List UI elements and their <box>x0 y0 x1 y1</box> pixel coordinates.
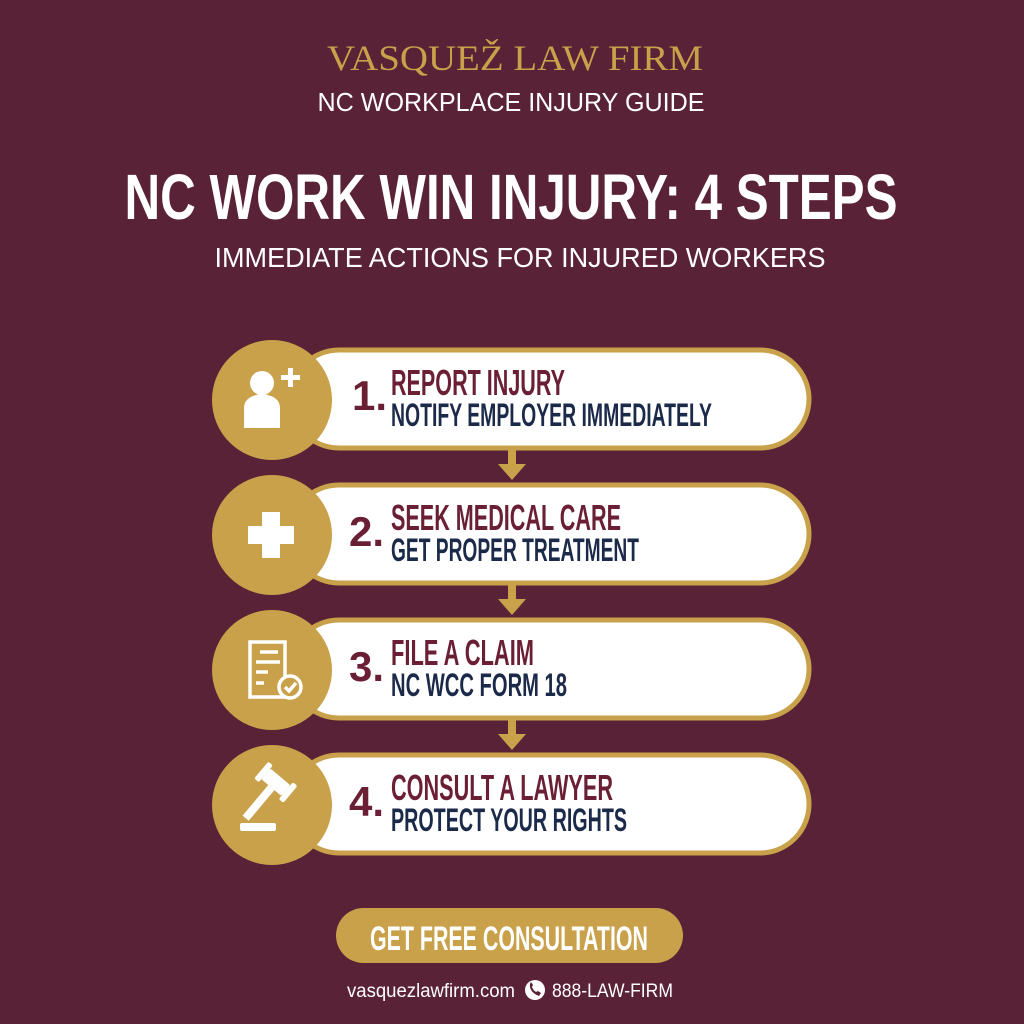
icon: medical cross <box>248 512 294 558</box>
step 3: FILE A CLAIM <box>391 632 534 673</box>
footer contact: vasquezlawfirm.com <box>347 981 515 1002</box>
step 3: 3. <box>349 643 384 690</box>
step 3: NC WCC FORM 18 <box>391 667 567 703</box>
arrow 1-2 <box>498 448 526 480</box>
step 2: GET PROPER TREATMENT <box>391 532 639 568</box>
brand name: VASQUEŽ LAW FIRM <box>327 38 703 78</box>
step 2 <box>212 475 809 595</box>
CTA button <box>336 908 683 963</box>
step 1: 1. <box>352 372 387 419</box>
step 4: CONSULT A LAWYER <box>391 767 613 808</box>
step 3 <box>212 610 809 730</box>
step 4: PROTECT YOUR RIGHTS <box>391 802 627 838</box>
icon: injured person <box>244 368 300 428</box>
CTA button: GET FREE CONSULTATION <box>370 920 648 958</box>
footer contact: 888-LAW-FIRM <box>552 981 673 1002</box>
step 4 <box>212 745 809 865</box>
step 4: 4. <box>349 778 384 825</box>
footer contact <box>347 980 673 1002</box>
step 1: REPORT INJURY <box>391 362 565 403</box>
arrow 3-4 <box>498 718 526 750</box>
step 2: 2. <box>349 508 384 555</box>
icon: claim form <box>250 642 301 698</box>
subtitle: IMMEDIATE ACTIONS FOR INJURED WORKERS <box>214 242 826 273</box>
step 1 <box>212 340 809 460</box>
icon: phone <box>525 980 545 1000</box>
guide label: NC WORKPLACE INJURY GUIDE <box>318 87 704 117</box>
step 1: NOTIFY EMPLOYER IMMEDIATELY <box>391 397 712 433</box>
icon: gavel <box>231 762 297 831</box>
arrow 2-3 <box>498 583 526 615</box>
step 2: SEEK MEDICAL CARE <box>391 497 621 538</box>
